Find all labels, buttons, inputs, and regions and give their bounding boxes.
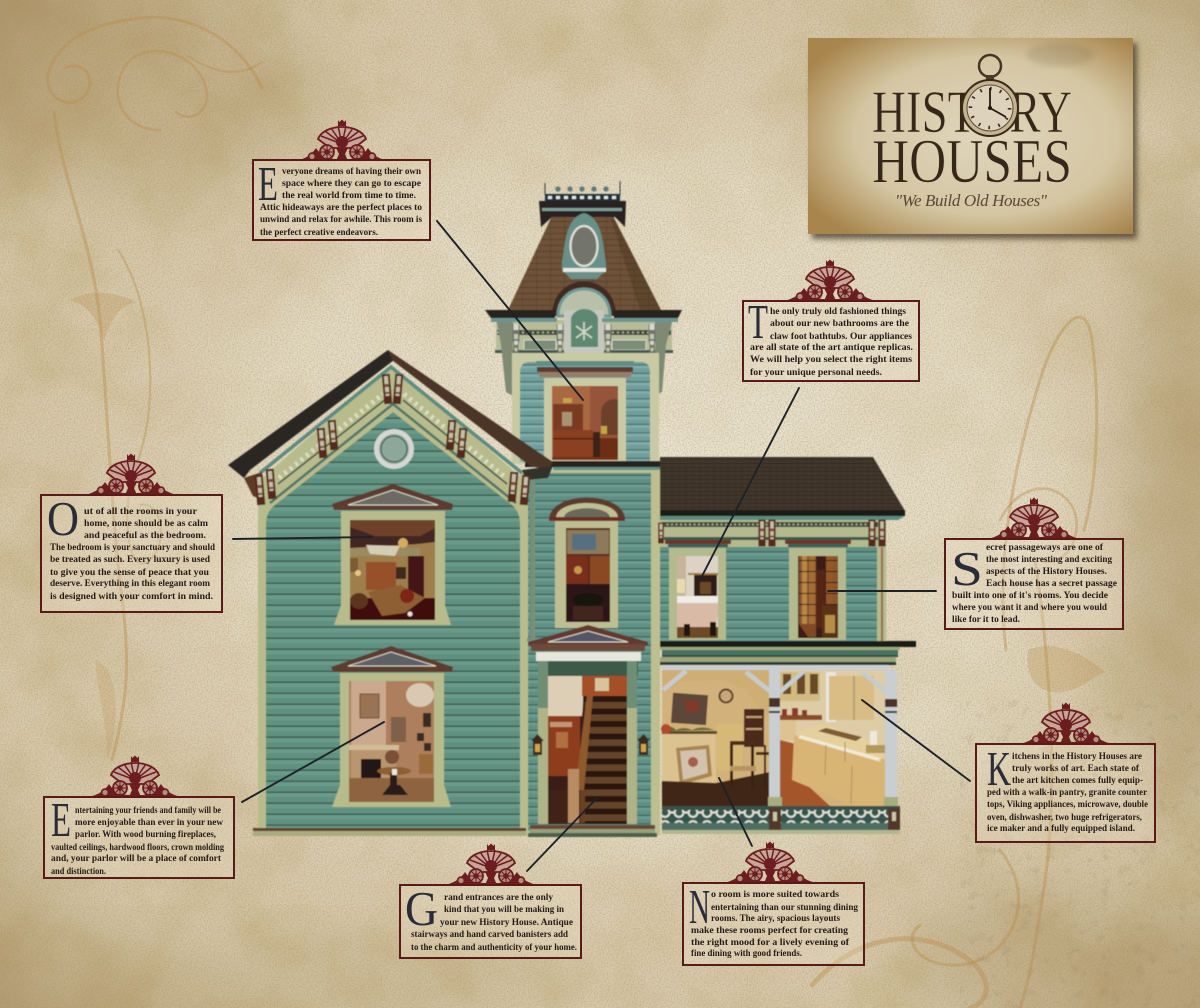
cresting [545,181,620,201]
callout: attic: Attic hideaways are the perfect places to [260,202,423,212]
callout: bedroom: to give you the sense of peace that you [50,567,209,577]
front entrance [528,625,657,837]
callout: bedroom [41,454,222,612]
callout: parlor: and distinction. [51,866,106,876]
downspout [512,478,532,830]
logo card [808,38,1137,239]
tower [485,181,682,473]
callout: secret passage: built into one of it's rooms. You decide [952,590,1108,600]
arrow: parlor [242,722,384,802]
icon: fan ornament [987,498,1081,539]
callout: parlor [44,756,234,878]
icon: door lanterns [531,734,650,755]
icon: fan ornament [723,842,817,883]
gable wall trim [258,365,527,836]
callout: secret passage: the most interesting and exciting [986,554,1113,564]
callout: attic: the perfect creative endeavors. [260,227,378,237]
photo: secret passage [798,556,838,638]
callout: kitchen: truly works of art. Each state of [1012,763,1140,773]
callout: parlor: E [51,792,71,847]
logo wordmark [872,79,1072,196]
bedroom window [332,484,453,625]
middle window [549,498,625,628]
porch [660,641,916,834]
callout: bathroom: about our new bathrooms are the [770,318,909,328]
callout: dining room: rooms. The airy, spacious layouts [711,913,841,923]
arrow: attic [437,221,583,400]
base trim [253,828,526,836]
callout: secret passage [945,498,1123,629]
arrow: secret passage [828,590,936,592]
side brackets [497,322,672,396]
callout: bedroom: is designed with your comfort in mind. [50,591,213,601]
frieze [495,320,673,353]
arrow: kitchen [862,700,970,781]
icon: fan ornament [88,756,182,797]
parlor window [331,646,453,807]
callout: bathroom: are all state of the art antique replicas. [750,342,913,352]
icon: fan ornament [1019,702,1113,744]
callout: attic: the real world from time to time. [282,190,416,200]
callout: bathroom: claw foot bathtubs. Our appliances [770,331,913,341]
callout: parlor: vaulted ceilings, hardwood floors, crown molding [51,842,224,852]
callout: attic: space where they can go to escape [282,178,421,188]
porch braces [663,671,886,692]
mansard roof [508,216,661,310]
photo: parlor [349,681,434,802]
callout: parlor: more enjoyable than ever in your new [75,817,224,827]
corbels [658,520,886,546]
callout: bathroom [743,260,919,381]
cornice [485,310,682,322]
callout: dining room: fine dining with good friends. [691,948,802,958]
callout: attic: E [258,156,278,211]
callout: kitchen: ped with a walk-in pantry, granite counter [987,787,1147,797]
callout: bathroom: for your unique personal needs. [750,367,882,377]
callout: bathroom: We will help you select the right items [750,354,913,364]
door pediment [528,625,648,651]
callout: kitchen [976,702,1155,842]
oval window [376,432,412,466]
oval dormer [562,213,606,279]
callout: entrance: rand entrances are the only [444,892,554,902]
logo wordmark: HISTORY [872,79,1072,145]
logo wordmark: HOUSES [872,128,1072,196]
roof cap [539,201,626,227]
callout: bathroom: he only truly old fashioned things [770,306,907,316]
callout: entrance: stairways and hand carved banisters add [411,929,568,939]
callout: secret passage: Each house has a secret passage [986,578,1117,588]
porch railing [662,806,900,834]
gable dark lines [270,404,516,503]
callout: kitchen: oven, dishwasher, two huge refrigerators, [987,812,1142,822]
arrow: dining room [719,778,752,846]
callout: bedroom: be treated as such. Every luxury is used [50,554,210,564]
photo: upper hall [566,528,610,622]
callout: kitchen: itchens in the History Houses are [1012,751,1142,761]
secret passage window [785,540,851,640]
callout: entrance [400,844,581,958]
photo: bathroom [677,556,718,638]
corbels [512,324,656,353]
roof edge [228,350,553,500]
icon: fan ornament [783,260,877,301]
callout: dining room: o room is more suited towards [711,889,840,899]
icon: fan ornament [444,844,538,885]
photo: bedroom [350,520,435,620]
icon: fan ornament [84,454,178,495]
photo: attic room [552,386,618,460]
main gable wing [228,350,553,836]
right wing [658,457,905,646]
bathroom window [665,540,731,640]
photo: staircase [548,676,627,824]
callout: bedroom: The bedroom is your sanctuary and should [50,542,215,552]
callout: dining room: make these rooms perfect for creating [691,925,849,935]
icon: pocket watch [962,55,1018,136]
tower base band [525,461,662,473]
callout: secret passage: ecret passageways are one of [986,542,1104,552]
porch columns [768,670,898,807]
arched dormer [552,282,616,353]
callout: kitchen: ice maker and a fully equipped island. [987,823,1135,833]
callout: entrance: G [405,881,438,936]
callout: bedroom: home, none should be as calm [84,518,209,528]
callout: entrance: to the charm and authenticity of your home. [411,942,577,952]
arrow: entrance [527,798,597,871]
callout: kitchen: tops, Viking appliances, microwave, double [987,799,1148,809]
callout: parlor: parlor. With wood burning fireplaces, [75,829,216,839]
callout: kitchen: K [987,741,1011,796]
callout: dining room: the right mood for a lively evening of [691,937,850,947]
callout: bedroom: and peaceful as the bedroom. [84,530,206,540]
tagline: "We Build Old Houses" [895,191,1048,210]
icon: fan ornament [295,120,389,161]
callout: bedroom: ut of all the rooms in your [84,506,197,516]
callout: bathroom: T [748,294,768,349]
leader lines [233,221,970,871]
right wing eave [660,510,905,540]
callout: dining room [683,842,864,965]
arrow: bedroom [233,537,372,539]
callout: kitchen: the art kitchen comes fully equip- [1012,775,1143,785]
callout: bedroom: O [47,491,79,546]
callout: dining room: entertaining than our stunning dining [711,902,858,912]
callout: secret passage: where you want it and where you would [952,602,1107,612]
house [228,181,916,837]
tower wall [512,353,659,464]
door step [528,825,657,837]
right wing wall [660,520,886,646]
callout: attic: veryone dreams of having their own [282,166,421,176]
callout: entrance: your new History House. Antique [440,917,573,927]
background: right flourish [812,317,1105,1008]
callout: attic [253,120,430,240]
callout: secret passage: like for it to lead. [952,614,1020,624]
arrow: bathroom [700,388,799,580]
right wing roof [660,457,905,511]
callout: entrance: kind that you will be making in [444,904,564,914]
callout: attic: unwind and relax for awhile. This room is [260,214,422,224]
callout: bedroom: deserve. Everything in this elegant room [50,578,211,588]
callout: secret passage: aspects of the History Houses. [986,566,1107,576]
porch beam [662,665,888,670]
middle section [512,470,660,835]
callout: parlor: and, your parlor will be a place of comfort [51,853,221,863]
callout: parlor: ntertaining your friends and family will be [75,805,221,815]
corbels [255,374,530,505]
callout: secret passage: S [951,541,983,596]
gable siding [266,412,520,830]
callout: dining room: N [689,879,710,934]
tower window [537,367,633,462]
photo: dining room and kitchen [661,670,888,806]
background: left flourish [48,17,262,760]
